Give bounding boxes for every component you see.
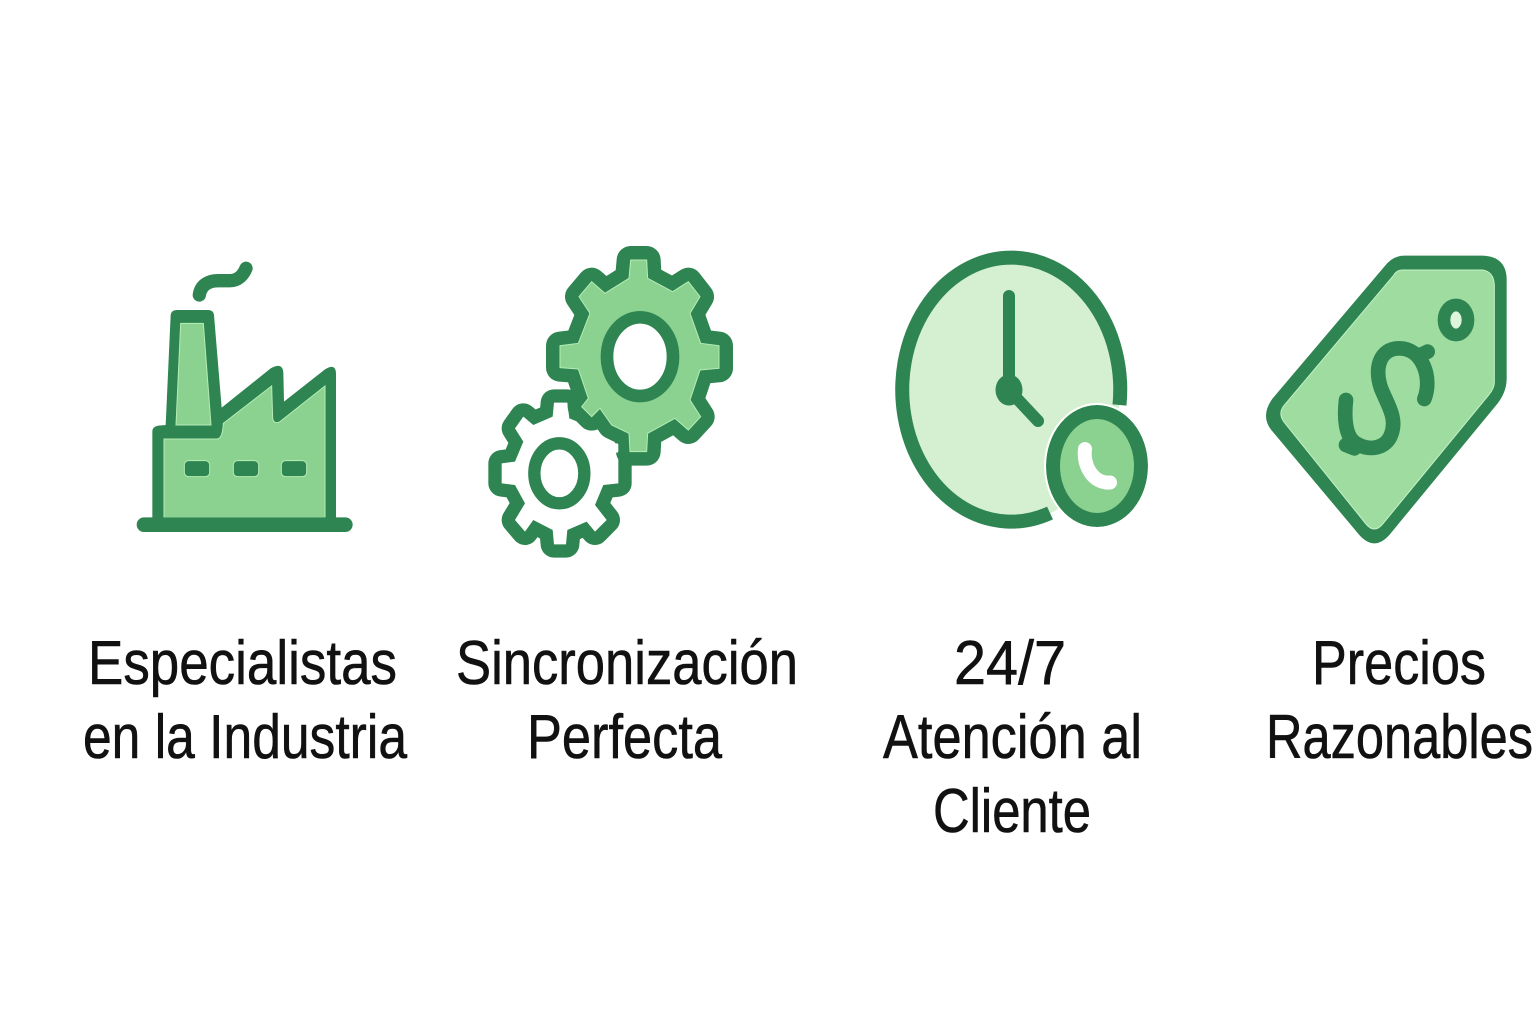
label: Precios Razonables: Precios <box>1312 629 1486 698</box>
label: Especialistas en la Industria: en la Industria <box>83 703 407 772</box>
label: Sincronización Perfecta: Perfecta <box>527 703 722 772</box>
panel: perfect synchronization <box>456 260 798 772</box>
label: 24/7 Atención al Cliente <box>883 629 1142 846</box>
label: Especialistas en la Industria: Especialistas <box>88 629 397 698</box>
icon: price tag <box>1266 256 1507 543</box>
label: 24/7 Atención al Cliente: 24/7 <box>954 629 1066 698</box>
icon: clock with phone <box>902 258 1149 528</box>
label: Precios Razonables <box>1266 629 1533 772</box>
panel: reasonable prices <box>1266 256 1533 772</box>
label: Sincronización Perfecta <box>456 629 798 772</box>
label: 24/7 Atención al Cliente: Cliente <box>933 777 1091 846</box>
icon: factory <box>144 268 345 525</box>
panel: industry specialists <box>83 268 407 772</box>
icon: gears <box>502 260 719 544</box>
label: Sincronización Perfecta: Sincronización <box>456 629 798 698</box>
panel: 24/7 customer service <box>883 258 1149 846</box>
label: Especialistas en la Industria <box>83 629 407 772</box>
label: 24/7 Atención al Cliente: Atención al <box>883 703 1142 772</box>
